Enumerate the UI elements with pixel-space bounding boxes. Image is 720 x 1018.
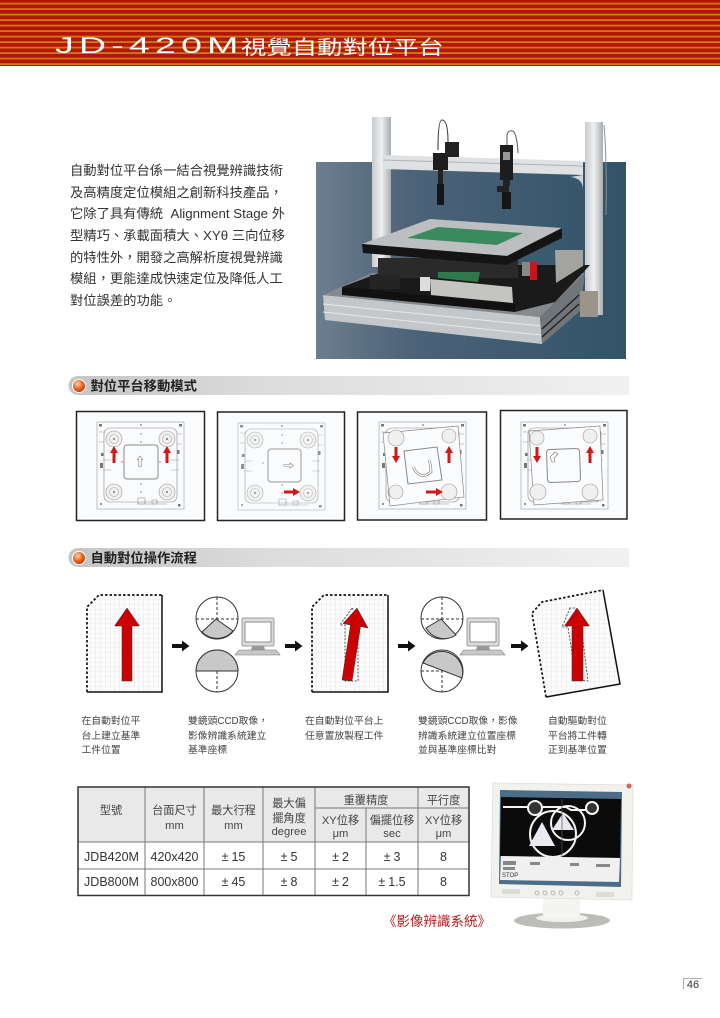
intro text block: 型精巧、承載面積大、XYθ 三向位移 — [70, 228, 285, 243]
specification table — [78, 787, 469, 896]
specification table: 平行度 — [427, 793, 460, 807]
monitor caption: 《影像辨識系統》 — [383, 914, 491, 929]
step captions: 在自動對位平 — [82, 714, 140, 727]
specification table: ±2 — [332, 850, 349, 864]
icon: orange ball — [72, 380, 86, 392]
step captions: 任意置放製程工件 — [305, 729, 384, 742]
monitor with vision system screen — [491, 783, 633, 928]
base frame — [323, 295, 542, 344]
specification table: 型號 — [100, 803, 122, 817]
step captions: 平台將工件轉 — [548, 729, 607, 742]
monitor with vision system screen: STOP — [502, 873, 518, 879]
specification table: 台面尺寸 — [152, 803, 197, 817]
step captions: 基準座標 — [188, 743, 227, 756]
step captions: 並與基準座標比對 — [418, 743, 497, 756]
intro text block: 自動對位平台係一結合視覺辨識技術 — [70, 162, 283, 178]
step 5 sheet — [532, 590, 620, 697]
intro text block: 模組，更能達成快速定位及降低人工 — [70, 271, 283, 286]
top plate — [362, 219, 562, 256]
specification table: ±1.5 — [378, 875, 406, 889]
panel: rotation — [358, 412, 486, 520]
specification table: 8 — [440, 850, 447, 864]
step captions: 在自動對位平台上 — [305, 714, 384, 727]
panel: forward move — [76, 412, 204, 520]
step captions: 雙鏡頭CCD取像，影像 — [418, 714, 518, 727]
intro text block: 及高精度定位模組之創新科技產品， — [70, 184, 283, 200]
step captions: 影像辨識系統建立 — [188, 729, 267, 742]
intro text block — [70, 162, 285, 308]
section heading: movement modes — [68, 376, 629, 395]
specification table: ±15 — [222, 850, 245, 864]
step captions — [82, 714, 607, 756]
specification table: ±2 — [332, 875, 349, 889]
step captions: 自動驅動對位 — [548, 714, 607, 727]
arrow — [172, 640, 190, 652]
specification table: XY位移 — [425, 813, 462, 827]
section heading: movement modes: 對位平台移動模式 — [90, 378, 197, 394]
section heading: alignment procedure: 自動對位操作流程 — [90, 550, 197, 566]
title — [55, 33, 444, 58]
specification table: μm — [436, 828, 451, 840]
step 1 sheet — [87, 595, 162, 692]
bracket — [580, 291, 598, 317]
specification table: μm — [333, 828, 348, 840]
red arrow — [564, 608, 590, 681]
icon: computer — [460, 618, 505, 655]
specification table: 擺角度 — [272, 811, 306, 825]
specification table: 重覆精度 — [344, 793, 388, 807]
title: JD-420M — [55, 33, 243, 58]
specification table: 偏擺位移 — [370, 813, 414, 827]
cameras — [433, 120, 518, 209]
specification table: JDB420M — [84, 850, 139, 864]
red arrow — [342, 608, 368, 681]
icon: computer — [235, 618, 280, 655]
page number: 46 — [687, 979, 699, 991]
header banner — [0, 0, 720, 66]
specification table: mm — [165, 820, 184, 832]
specification table: XY位移 — [322, 813, 359, 827]
specification table: 420x420 — [151, 850, 199, 864]
section heading: alignment procedure — [68, 548, 629, 567]
step captions: 台上建立基準 — [82, 729, 140, 742]
intro text block: 對位誤差的功能。 — [70, 292, 176, 308]
specification table: JDB800M — [84, 875, 139, 889]
specification table: 800x800 — [151, 875, 199, 889]
step captions: 工件位置 — [82, 743, 121, 756]
specification table: ±3 — [384, 850, 400, 864]
step captions: 正到基準位置 — [548, 743, 607, 756]
specification table: ±5 — [281, 850, 297, 864]
step 4 camera views and computer — [421, 597, 505, 692]
page number — [684, 978, 702, 991]
product photo — [316, 117, 626, 359]
specification table: ±8 — [281, 875, 297, 889]
panel: skew move — [500, 410, 627, 519]
specification table: mm — [224, 820, 243, 832]
arrow — [398, 640, 416, 652]
specification table: 8 — [440, 875, 447, 889]
step 3 sheet — [312, 595, 388, 692]
mid deck — [342, 265, 590, 312]
icon: orange ball — [72, 552, 86, 564]
specification table: 最大偏 — [272, 796, 306, 810]
specification table: degree — [272, 826, 306, 838]
icon: curved rotation arrow — [413, 460, 431, 476]
specification table: 最大行程 — [211, 803, 256, 817]
red arrow — [114, 608, 140, 681]
step 2 camera views and computer — [196, 597, 280, 692]
panel: sideways move — [218, 412, 344, 520]
specification table: ±45 — [222, 875, 245, 889]
step captions: 雙鏡頭CCD取像， — [188, 714, 268, 727]
arrow — [511, 640, 528, 652]
step captions: 辨識系統建立位置座標 — [418, 729, 516, 742]
arrow — [285, 640, 302, 652]
specification table: sec — [383, 828, 401, 840]
intro text block: 它除了具有傳統 Alignment Stage 外 — [70, 205, 285, 221]
title: 視覺自動對位平台 — [241, 37, 444, 58]
intro text block: 的特性外，開發之高解析度視覺辨識 — [70, 249, 283, 265]
